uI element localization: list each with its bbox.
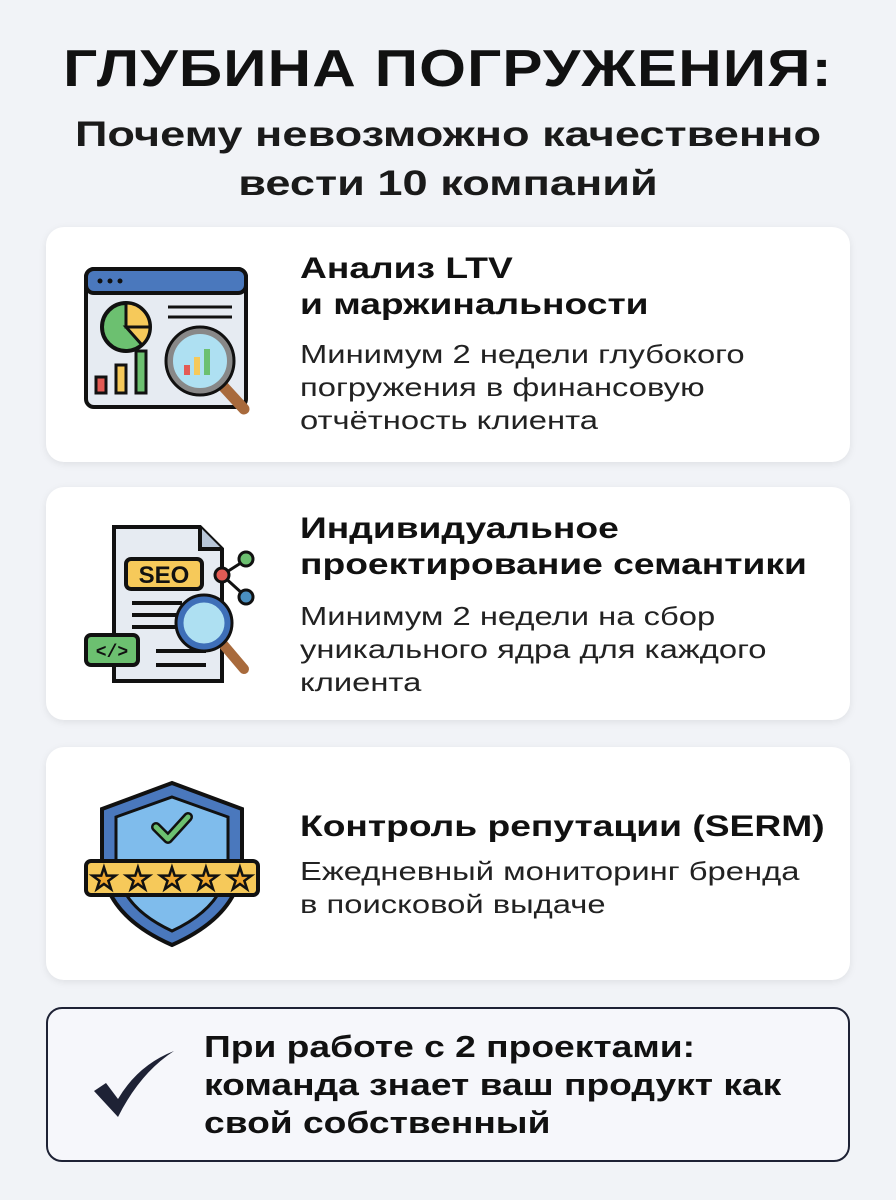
description: Минимум 2 недели глубокого [300, 339, 745, 369]
icon: checkmark [94, 1051, 174, 1117]
icon: shield with stars: ★ [159, 862, 185, 897]
callout: conclusion [46, 1007, 850, 1162]
description [300, 601, 767, 697]
description [300, 856, 800, 919]
icon: SEO document [84, 525, 254, 683]
description: уникального ядра для каждого [300, 634, 767, 664]
heading: Контроль репутации (SERM) [300, 810, 825, 843]
subtitle [75, 115, 821, 203]
icon: shield with stars: ★ [227, 862, 253, 897]
heading [300, 252, 649, 321]
icon: SEO document: </> [96, 643, 128, 663]
description: погружения в финансовую [300, 372, 705, 402]
panel: semantics [46, 487, 850, 720]
description: Минимум 2 недели на сбор [300, 601, 715, 631]
panel: SERM [46, 747, 850, 980]
panel: LTV [46, 227, 850, 462]
icon: shield with stars: ★ [193, 862, 219, 897]
conclusion text: команда знает ваш продукт как [204, 1067, 781, 1102]
description: Ежедневный мониторинг бренда [300, 856, 799, 886]
heading [300, 512, 807, 581]
description: в поисковой выдаче [300, 889, 606, 919]
conclusion text [204, 1029, 782, 1140]
title: ГЛУБИНА ПОГРУЖЕНИЯ: [63, 40, 833, 98]
icon: dashboard [84, 267, 250, 414]
icon: shield with stars: ★ [91, 862, 117, 897]
description: отчётность клиента [300, 405, 598, 435]
description: клиента [300, 667, 421, 697]
subtitle: Почему невозможно качественно [75, 115, 821, 154]
icon: shield with stars: ★ [125, 862, 151, 897]
icon: shield with stars [84, 780, 260, 948]
conclusion text: свой собственный [204, 1105, 550, 1140]
heading: Индивидуальное [300, 512, 619, 545]
heading: проектирование семантики [300, 548, 807, 581]
heading: Анализ LTV [300, 252, 513, 285]
conclusion text: При работе с 2 проектами: [204, 1029, 695, 1064]
subtitle: вести 10 компаний [238, 164, 658, 203]
heading: и маржинальности [300, 288, 649, 321]
description [300, 339, 745, 435]
icon: SEO document: SEO [139, 562, 189, 589]
